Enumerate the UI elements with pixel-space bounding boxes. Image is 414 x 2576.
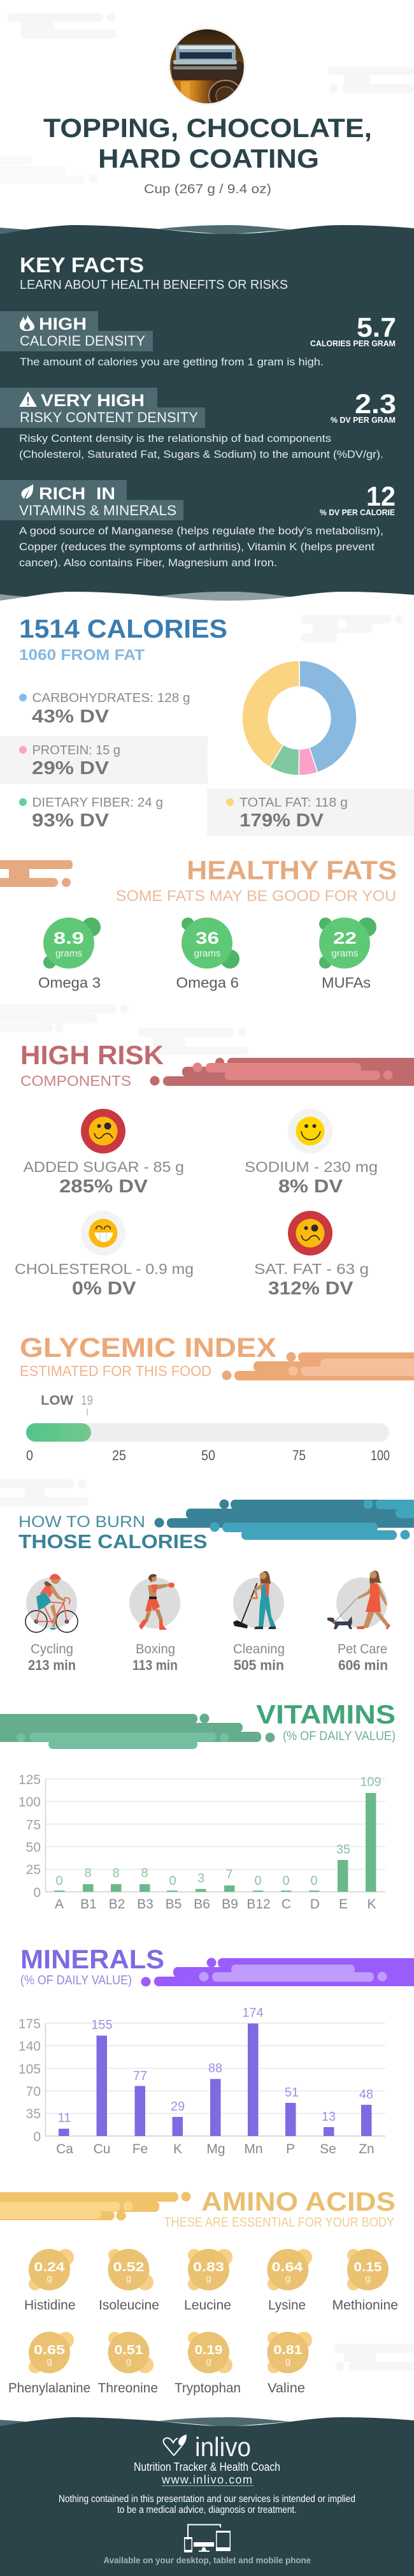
heading: minerals: (% OF DAILY VALUE) bbox=[20, 1973, 132, 1987]
serving size: Cup (267 g / 9.4 oz) bbox=[144, 182, 271, 196]
amino: tryptophan: 0.19 bbox=[195, 2343, 223, 2357]
heading: key facts: LEARN ABOUT HEALTH BENEFITS OR RISKS bbox=[20, 278, 288, 292]
bar chart: vitamins: E bbox=[339, 1897, 348, 1912]
glycemic value label bbox=[41, 1393, 93, 1416]
heading: calories: 1060 FROM FAT bbox=[19, 647, 145, 664]
amino: lysine bbox=[268, 2249, 312, 2313]
icon: devices bbox=[184, 2524, 231, 2552]
rich in vitamins and minerals: Copper (reduces the symptoms of arthritis), Vitamin K (helps prevent bbox=[19, 541, 375, 553]
calorie density: CALORIES PER GRAM bbox=[310, 339, 396, 348]
macro: carbohydrates: 43% DV bbox=[32, 706, 110, 727]
bar chart: vitamins: 0 bbox=[169, 1874, 176, 1888]
amino: threonine bbox=[98, 2332, 158, 2396]
badge: mufas bbox=[319, 918, 376, 991]
heading: glycemic index: GLYCEMIC INDEX bbox=[20, 1333, 276, 1363]
amino: phenylalanine bbox=[8, 2332, 90, 2396]
amino: histidine: 0.24 bbox=[34, 2260, 66, 2274]
heading: amino acids bbox=[164, 2186, 396, 2230]
calorie density: HIGH bbox=[39, 314, 87, 333]
bar chart: vitamins: C bbox=[282, 1897, 291, 1912]
risk item: added sugar: 285% DV bbox=[59, 1176, 148, 1197]
call to action: Available on your desktop, tablet and mobile phone bbox=[103, 2555, 311, 2565]
icon: worried face bbox=[288, 1211, 332, 1255]
amino: lysine: 0.64 bbox=[271, 2260, 304, 2274]
bar chart: minerals: 11 bbox=[58, 2111, 71, 2125]
rich in vitamins and minerals: % DV PER CALORIE bbox=[320, 508, 395, 517]
amino: valine: 0.81 bbox=[274, 2343, 302, 2357]
risk item: sodium: SODIUM - 230 mg bbox=[245, 1159, 378, 1175]
risky content density: VERY HIGH bbox=[41, 391, 145, 410]
macro: protein: PROTEIN: 15 g bbox=[32, 743, 120, 757]
disclaimer: to be a medical advice, diagnosis or treatment. bbox=[117, 2505, 297, 2515]
glycemic value label: 19 bbox=[81, 1393, 93, 1408]
icon: warning triangle bbox=[19, 392, 37, 407]
bar chart: vitamins: 100 bbox=[18, 1795, 41, 1810]
activity: cycling: Cycling bbox=[31, 1642, 73, 1657]
risky content density: Risky Content density is the relationship of bad components bbox=[19, 432, 331, 444]
amino: phenylalanine: g bbox=[46, 2356, 52, 2367]
gauge axis labels: 0 bbox=[26, 1447, 33, 1463]
panel: how to burn those calories bbox=[18, 1500, 414, 1673]
activity: cleaning: Cleaning bbox=[233, 1642, 285, 1657]
bar chart: vitamins: B2 bbox=[109, 1897, 125, 1912]
bar chart: minerals: 88 bbox=[208, 2061, 222, 2075]
badge: mufas: MUFAs bbox=[322, 974, 371, 991]
gauge axis labels: 100 bbox=[371, 1447, 390, 1463]
amino: lysine: g bbox=[285, 2273, 290, 2284]
macro: dietary fiber: 93% DV bbox=[32, 810, 110, 831]
activity: cleaning: 505 min bbox=[234, 1657, 284, 1673]
rich in vitamins and minerals: RICH IN bbox=[39, 484, 115, 503]
bar chart: minerals: 155 bbox=[91, 2018, 113, 2032]
amino: threonine: 0.51 bbox=[115, 2343, 143, 2357]
banner decoration bbox=[154, 1500, 414, 1540]
bar chart: minerals: 29 bbox=[171, 2100, 185, 2114]
activity: cycling bbox=[25, 1574, 78, 1673]
bar chart: minerals: 0 bbox=[33, 2130, 41, 2144]
banner decoration bbox=[150, 1058, 414, 1086]
heading: healthy fats: SOME FATS MAY BE GOOD FOR YOU bbox=[116, 888, 396, 905]
icon: heart and leaf bbox=[164, 2434, 187, 2455]
panel: footer bbox=[0, 2417, 414, 2576]
badge: omega 3 bbox=[38, 918, 101, 991]
bar chart: minerals: 77 bbox=[133, 2069, 147, 2083]
heading: amino acids: AMINO ACIDS bbox=[201, 2186, 396, 2216]
panel: vitamins bbox=[0, 1699, 396, 1912]
amino: leucine: Leucine bbox=[184, 2298, 231, 2313]
macro: total fat: TOTAL FAT: 118 g bbox=[239, 796, 348, 810]
heading: minerals bbox=[20, 1944, 164, 1987]
badge: omega 6: 36 bbox=[196, 928, 219, 948]
badge: omega 6 bbox=[176, 918, 239, 991]
risky content density bbox=[0, 388, 396, 460]
bar chart: vitamins: 0 bbox=[254, 1874, 262, 1888]
heading: healthy fats: HEALTHY FATS bbox=[187, 855, 397, 885]
icon: grinning face bbox=[81, 1211, 125, 1255]
risk item: cholesterol: CHOLESTEROL - 0.9 mg bbox=[15, 1261, 194, 1277]
amino: isoleucine: 0.52 bbox=[113, 2260, 144, 2274]
amino: histidine bbox=[24, 2249, 75, 2313]
tagline: Nutrition Tracker & Health Coach bbox=[134, 2461, 280, 2473]
bar chart: vitamins: 0 bbox=[55, 1874, 63, 1888]
amino: leucine bbox=[184, 2249, 232, 2313]
amino: valine bbox=[268, 2332, 312, 2396]
heading: minerals: MINERALS bbox=[20, 1944, 164, 1974]
banner decoration bbox=[0, 860, 73, 887]
heading: vitamins: VITAMINS bbox=[256, 1699, 396, 1729]
heading: vitamins: (% OF DAILY VALUE) bbox=[283, 1729, 396, 1743]
bar chart: minerals: 105 bbox=[18, 2062, 41, 2077]
bar chart: vitamins: B1 bbox=[80, 1897, 97, 1912]
macro: dietary fiber: DIETARY FIBER: 24 g bbox=[32, 796, 163, 810]
bar chart: vitamins: 0 bbox=[310, 1874, 318, 1888]
bar chart: vitamins: 0 bbox=[282, 1874, 290, 1888]
activity: cleaning bbox=[233, 1571, 285, 1673]
bar chart: minerals: 48 bbox=[359, 2088, 373, 2102]
bar chart: minerals: Se bbox=[320, 2142, 336, 2156]
amino: methionine bbox=[332, 2249, 398, 2313]
bar chart: vitamins bbox=[18, 1773, 385, 1912]
bar chart: vitamins: 8 bbox=[141, 1866, 148, 1880]
activity: boxing: 113 min bbox=[132, 1657, 178, 1673]
banner decoration bbox=[141, 1958, 414, 1987]
bar chart: minerals: 51 bbox=[285, 2086, 299, 2100]
risky content density: 2.3 bbox=[355, 389, 396, 420]
gauge axis labels bbox=[26, 1447, 390, 1463]
heading: glycemic index bbox=[20, 1333, 276, 1379]
icon: woman walking dog bbox=[327, 1570, 390, 1630]
rich in vitamins and minerals: 12 bbox=[366, 481, 396, 512]
bar chart: vitamins: A bbox=[55, 1897, 64, 1912]
calorie density: The amount of calories you are getting from 1 gram is high. bbox=[20, 356, 324, 368]
panel: calories bbox=[0, 614, 414, 836]
title: HARD COATING bbox=[98, 143, 319, 173]
risky content density: (Cholesterol, Saturated Fat, Sugars & Sodium) to the amount (%DV/gr). bbox=[19, 448, 383, 460]
donut chart bbox=[242, 661, 357, 775]
heading: calories bbox=[19, 614, 227, 664]
risky content density: % DV PER GRAM bbox=[331, 416, 396, 425]
calorie density bbox=[0, 311, 396, 368]
bar chart: minerals: 13 bbox=[322, 2110, 336, 2124]
heading: high risk: HIGH RISK bbox=[20, 1040, 164, 1070]
risk item: sodium: 8% DV bbox=[278, 1176, 343, 1197]
amino: tryptophan: g bbox=[206, 2356, 211, 2367]
amino: leucine: 0.83 bbox=[193, 2260, 224, 2274]
heading: key facts bbox=[20, 253, 288, 292]
icon: flame bbox=[20, 314, 34, 331]
heading: high risk bbox=[20, 1040, 164, 1089]
gauge axis labels: 25 bbox=[112, 1447, 126, 1463]
icon: boxer bbox=[129, 1574, 180, 1630]
bar chart: vitamins: B12 bbox=[246, 1897, 271, 1912]
bar chart: vitamins: 8 bbox=[112, 1866, 120, 1880]
risk item: saturated fat bbox=[254, 1211, 369, 1299]
disclaimer: Nothing contained in this presentation and our services is intended or implied bbox=[59, 2494, 355, 2505]
panel: key facts bbox=[0, 225, 414, 601]
heading: high risk: COMPONENTS bbox=[20, 1072, 131, 1089]
title: TOPPING, CHOCOLATE, bbox=[43, 113, 372, 143]
amino: threonine: g bbox=[126, 2356, 131, 2367]
icon: smiling face bbox=[288, 1109, 332, 1153]
bar chart: minerals bbox=[18, 2006, 385, 2156]
bar chart: minerals: Zn bbox=[359, 2142, 375, 2156]
amino: histidine: g bbox=[46, 2273, 52, 2284]
badge: omega 6: Omega 6 bbox=[176, 974, 239, 991]
activity: boxing bbox=[129, 1574, 180, 1673]
risk item: added sugar: ADDED SUGAR - 85 g bbox=[23, 1159, 184, 1175]
gauge axis labels: 50 bbox=[201, 1447, 215, 1463]
activity: cycling: 213 min bbox=[28, 1657, 76, 1673]
amino: phenylalanine: Phenylalanine bbox=[8, 2381, 90, 2396]
banner decoration bbox=[0, 2192, 191, 2220]
activity: pet care bbox=[327, 1570, 390, 1673]
bar chart: minerals: Fe bbox=[132, 2142, 148, 2156]
badge: omega 3: 8.9 bbox=[54, 928, 84, 948]
website link: www.inlivo.com bbox=[161, 2473, 252, 2486]
amino: threonine: Threonine bbox=[98, 2381, 158, 2396]
amino: methionine: g bbox=[365, 2273, 371, 2284]
bar chart: vitamins: 8 bbox=[84, 1866, 92, 1880]
bar chart: minerals: K bbox=[173, 2142, 182, 2156]
amino: isoleucine: Isoleucine bbox=[99, 2298, 159, 2313]
heading: how to burn: HOW TO BURN bbox=[18, 1513, 145, 1531]
bar chart: vitamins: B3 bbox=[137, 1897, 153, 1912]
heading: vitamins bbox=[256, 1699, 396, 1743]
bar chart: minerals: 140 bbox=[18, 2039, 41, 2054]
bar chart: vitamins: B9 bbox=[222, 1897, 238, 1912]
rich in vitamins and minerals: cancer). Also contains Fiber, Magnesium and Iron. bbox=[19, 557, 277, 569]
bar chart: vitamins: 50 bbox=[26, 1840, 41, 1855]
panel: high risk bbox=[15, 1040, 414, 1299]
rich in vitamins and minerals bbox=[0, 480, 396, 569]
macro: protein: 29% DV bbox=[32, 758, 110, 779]
logo: inlivo bbox=[164, 2432, 251, 2462]
rich in vitamins and minerals: VITAMINS & MINERALS bbox=[19, 502, 176, 518]
calorie density: 5.7 bbox=[357, 312, 396, 343]
badge: mufas: grams bbox=[331, 948, 358, 959]
risky content density: RISKY CONTENT DENSITY bbox=[20, 409, 198, 425]
bar chart: vitamins: D bbox=[310, 1897, 320, 1912]
bar chart: vitamins: 125 bbox=[18, 1773, 41, 1787]
bar chart: vitamins: 0 bbox=[33, 1885, 41, 1900]
bar chart: vitamins: 25 bbox=[26, 1862, 41, 1877]
title bbox=[43, 113, 372, 173]
bar chart: vitamins: B6 bbox=[194, 1897, 210, 1912]
banner decoration bbox=[222, 1352, 414, 1380]
badge: omega 3: grams bbox=[55, 948, 82, 959]
bar chart: minerals: 35 bbox=[26, 2107, 41, 2121]
risk item: sodium bbox=[245, 1109, 378, 1197]
risk item: added sugar bbox=[23, 1109, 184, 1197]
amino: isoleucine bbox=[99, 2249, 159, 2313]
panel: glycemic index bbox=[20, 1333, 414, 1463]
amino: methionine: Methionine bbox=[332, 2298, 398, 2313]
bar chart: vitamins: 35 bbox=[336, 1843, 350, 1857]
amino: methionine: 0.15 bbox=[354, 2260, 382, 2274]
bar chart: minerals: 70 bbox=[26, 2084, 41, 2099]
disclaimer bbox=[59, 2494, 355, 2515]
macro: total fat bbox=[207, 789, 414, 836]
heading: glycemic index: ESTIMATED FOR THIS FOOD bbox=[20, 1363, 211, 1379]
bar chart: minerals: 175 bbox=[18, 2017, 41, 2031]
calorie density: CALORIE DENSITY bbox=[20, 333, 145, 349]
gauge axis labels: 75 bbox=[292, 1447, 306, 1463]
heading: how to burn: THOSE CALORIES bbox=[18, 1530, 208, 1553]
macro: total fat: 179% DV bbox=[239, 810, 324, 831]
icon: cyclist bbox=[25, 1574, 78, 1632]
macro: carbohydrates bbox=[19, 691, 190, 727]
activity: pet care: 606 min bbox=[338, 1657, 388, 1673]
bar chart: minerals: Cu bbox=[94, 2142, 110, 2156]
bar chart: vitamins: K bbox=[367, 1897, 376, 1912]
panel: amino acids bbox=[0, 2186, 398, 2396]
risk item: cholesterol: 0% DV bbox=[72, 1278, 136, 1299]
icon: leaf bbox=[22, 484, 33, 499]
icon: person sweeping bbox=[233, 1571, 284, 1629]
risk item: cholesterol bbox=[15, 1211, 194, 1299]
heading: how to burn bbox=[18, 1513, 208, 1553]
amino: isoleucine: g bbox=[126, 2273, 131, 2284]
bar chart: vitamins: 75 bbox=[26, 1818, 41, 1833]
risk item: saturated fat: SAT. FAT - 63 g bbox=[254, 1261, 369, 1277]
panel: healthy fats bbox=[0, 855, 397, 991]
heading: key facts: KEY FACTS bbox=[20, 253, 144, 277]
badge: omega 6: grams bbox=[194, 948, 220, 959]
panel: minerals bbox=[18, 1944, 414, 2156]
amino: valine: g bbox=[285, 2356, 290, 2367]
bar chart: minerals: 174 bbox=[242, 2006, 264, 2020]
bar chart: minerals: Mg bbox=[206, 2142, 225, 2156]
badge: omega 3: Omega 3 bbox=[38, 974, 101, 991]
amino: histidine: Histidine bbox=[24, 2298, 75, 2313]
activity: boxing: Boxing bbox=[136, 1642, 175, 1657]
macro: protein bbox=[0, 736, 208, 784]
bar chart: vitamins: B5 bbox=[166, 1897, 182, 1912]
bar chart: vitamins: 109 bbox=[360, 1775, 382, 1789]
bar chart: minerals: Ca bbox=[56, 2142, 73, 2156]
amino: tryptophan bbox=[175, 2332, 241, 2396]
activity: pet care: Pet Care bbox=[338, 1642, 387, 1657]
amino: tryptophan: Tryptophan bbox=[175, 2381, 241, 2396]
heading: healthy fats bbox=[116, 855, 397, 905]
amino: leucine: g bbox=[206, 2273, 211, 2284]
bar chart: vitamins: 7 bbox=[225, 1868, 233, 1882]
badge: mufas: 22 bbox=[333, 928, 357, 948]
bar chart: minerals: Mn bbox=[244, 2142, 263, 2156]
heading: calories: 1514 CALORIES bbox=[19, 614, 227, 643]
rich in vitamins and minerals: A good source of Manganese (helps regulate the body’s metabolism), bbox=[19, 525, 383, 537]
glycemic value label: LOW bbox=[41, 1393, 73, 1408]
macro: dietary fiber bbox=[19, 796, 163, 831]
icon: worried face bbox=[81, 1109, 125, 1153]
bar chart: minerals: P bbox=[286, 2142, 295, 2156]
food photo: jar bbox=[168, 27, 246, 111]
amino: valine: Valine bbox=[268, 2381, 305, 2396]
risk item: saturated fat: 312% DV bbox=[268, 1278, 353, 1299]
macro: carbohydrates: CARBOHYDRATES: 128 g bbox=[32, 691, 190, 705]
amino: lysine: Lysine bbox=[268, 2298, 306, 2313]
logo: inlivo: inlivo bbox=[195, 2432, 251, 2462]
bar chart: vitamins: 3 bbox=[197, 1871, 204, 1885]
glycemic gauge bbox=[26, 1423, 389, 1442]
banner decoration bbox=[0, 1714, 275, 1749]
amino: phenylalanine: 0.65 bbox=[34, 2343, 65, 2357]
